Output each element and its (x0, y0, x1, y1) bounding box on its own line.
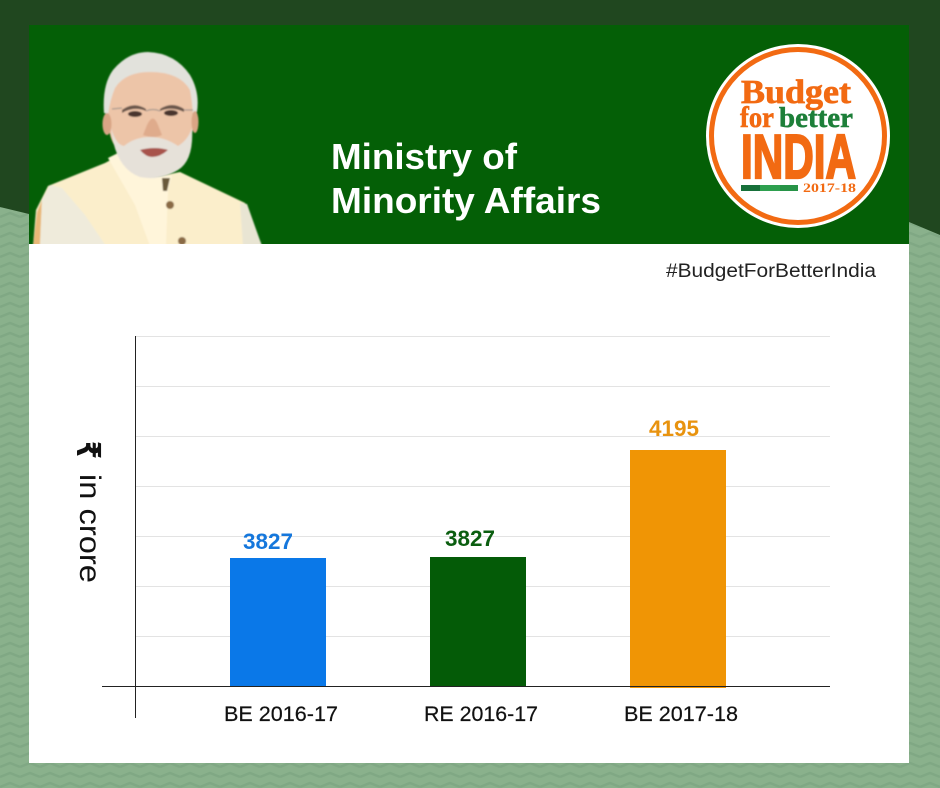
bar: RE 2016-17: 3827 (445, 526, 495, 551)
bar: BE 2017-18 (624, 416, 738, 726)
bar: RE 2016-17: RE 2016-17 (424, 703, 538, 726)
badge: Budget for better India 2017-18: 2017-18 (803, 180, 857, 195)
portrait illustration (33, 52, 262, 246)
head and face (102, 52, 198, 178)
title: Ministry of (331, 136, 518, 177)
badge: Budget for better India 2017-18: better (779, 103, 853, 134)
hashtag: #BudgetForBetterIndia (666, 261, 876, 282)
badge: Budget for better India 2017-18: INDIA (741, 123, 856, 192)
jacket and body (33, 152, 262, 246)
title (331, 136, 601, 221)
y axis label: in crore (73, 474, 106, 583)
bar: BE 2017-18: 4195 (649, 416, 699, 441)
bar: BE 2016-17: BE 2016-17 (224, 703, 338, 726)
bar chart (69, 336, 830, 726)
badge: Budget for better India 2017-18 (706, 44, 890, 228)
bar: BE 2016-17: 3827 (243, 529, 293, 554)
title: Minority Affairs (331, 180, 601, 221)
header band (29, 25, 909, 244)
bar: RE 2016-17 (424, 526, 538, 726)
badge: Budget for better India 2017-18: Budget (741, 74, 852, 111)
badge: Budget for better India 2017-18: for (740, 101, 774, 134)
y axis label (69, 441, 108, 583)
bar: BE 2017-18: BE 2017-18 (624, 703, 738, 726)
y axis label: ₹ (69, 441, 108, 459)
bar: BE 2016-17 (224, 529, 338, 726)
